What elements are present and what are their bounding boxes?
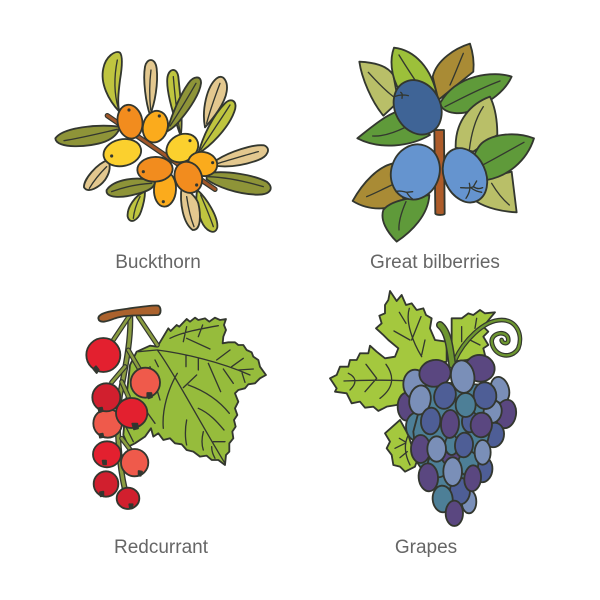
tendril: curl [455,320,520,360]
label: Redcurrant: Redcurrant [114,537,209,558]
stalks: green pedicels [112,312,157,490]
illustration: grape bunch [330,291,520,526]
berry: light blue right [434,141,496,210]
berry: light blue left [383,137,447,207]
label: Buckthorn: Buckthorn [115,252,201,273]
branch: brown twig [98,306,161,322]
panel: grapes [330,291,520,558]
illustration: redcurrant sprig [86,306,266,509]
label: Grapes: Grapes [395,537,457,558]
panel: buckthorn [55,52,271,273]
leaves: bilberry foliage [353,44,534,242]
stem: sprig [434,130,445,215]
panel: redcurrant [86,306,266,558]
label: Great bilberries: Great bilberries [370,252,500,273]
illustration: buckthorn branch [55,52,271,232]
grapes: fruit cluster [398,353,518,526]
berries: sea buckthorn fruits [101,103,219,207]
leaves: vine foliage [330,291,495,472]
stem: branch [107,116,215,189]
illustration: bilberry sprig [353,44,534,242]
berries: red currants [86,338,160,509]
leaf: currant [123,318,266,465]
leaves: buckthorn foliage [55,52,271,232]
berry: dark blue [384,72,451,143]
stem: stalk [440,325,452,365]
panel: great bilberries [353,44,534,273]
